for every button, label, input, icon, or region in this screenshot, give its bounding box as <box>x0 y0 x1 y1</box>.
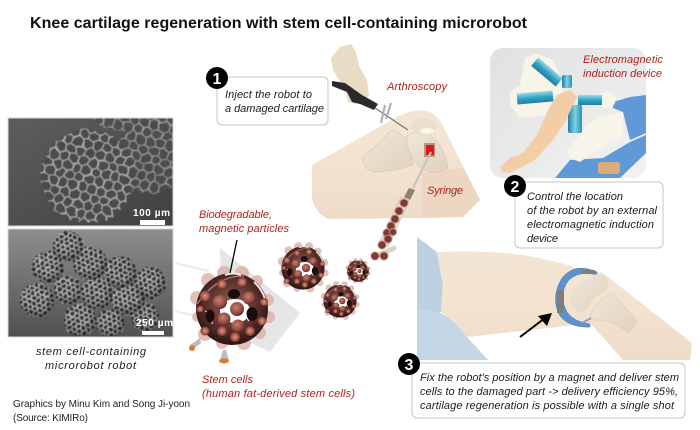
callout 2: electromagnetic induction <box>527 219 654 231</box>
label: device <box>583 54 664 80</box>
leg <box>500 90 577 173</box>
callout 2: of the robot by an external <box>527 205 658 217</box>
label: device: Electromagnetic <box>583 54 664 66</box>
bone: femur end <box>570 274 608 312</box>
credit: (Source: KIMIRo) <box>13 413 88 424</box>
label: stem cells <box>202 374 355 400</box>
callout 2 <box>504 175 663 248</box>
scale label: 250 µm: 250 µm <box>136 318 173 329</box>
bone: tibia <box>590 293 637 333</box>
caption: microrobot photos: stem cell-containing <box>36 346 147 358</box>
device frame <box>510 53 623 162</box>
label: biodegradable particles: magnetic particles <box>199 223 290 235</box>
badge 1: 1 <box>213 71 222 88</box>
callout 2: device <box>527 233 558 245</box>
large microrobot <box>190 266 275 350</box>
callout 3: Fix the robot's position by a magnet and deliver stem <box>420 372 679 384</box>
icon: stem cell <box>189 338 201 351</box>
badge 3: 3 <box>405 357 414 374</box>
label: biodegradable particles: Biodegradable, <box>199 209 272 221</box>
panel: electromagnetic induction device <box>490 48 664 178</box>
pointer: particles <box>230 240 237 273</box>
callout 1: a damaged cartilage <box>225 103 324 115</box>
panel: knee with magnet ring <box>417 237 692 360</box>
label: arthroscopy: Arthroscopy <box>386 81 448 93</box>
credit: Graphics by Minu Kim and Song Ji-yoon <box>13 399 190 410</box>
label: stem cells: Stem cells <box>202 374 254 386</box>
badge 3 <box>398 353 420 375</box>
icon: stem cell <box>219 350 229 364</box>
arrow <box>520 313 552 337</box>
callout 1 <box>206 67 328 125</box>
syringe with robots <box>371 152 431 260</box>
knee: arthroscopy view <box>312 110 480 219</box>
bone: patella <box>412 118 436 136</box>
callout 3: cells to the damaged part -> delivery efficiency 95%, <box>420 386 678 398</box>
callout 3 <box>398 353 685 418</box>
label: stem cells: (human fat-derived stem cells) <box>202 388 355 400</box>
magnet coils <box>517 58 602 133</box>
badge 2 <box>504 175 526 197</box>
photo: single microrobot SEM <box>8 118 174 226</box>
scale label: 100 µm: 100 µm <box>133 208 170 219</box>
patient body <box>555 95 646 178</box>
medium microrobot <box>278 242 329 293</box>
damaged cartilage marker <box>424 143 435 157</box>
icon: gloved hand with arthroscope <box>331 44 408 130</box>
bone: tibia and cartilage <box>407 132 448 172</box>
credit <box>13 399 190 424</box>
photo: microrobot cluster SEM <box>8 229 173 337</box>
label: syringe: Syringe <box>427 185 463 197</box>
bone: femur <box>363 130 413 172</box>
label: biodegradable particles <box>199 209 290 235</box>
magnification beam <box>175 248 300 352</box>
small microrobot <box>345 258 371 283</box>
caption: microrobot photos <box>36 346 147 372</box>
callout 3: cartilage regeneration is possible with a single shot <box>420 400 675 412</box>
caption: microrobot photos: microrobot robot <box>45 360 137 372</box>
badge 2: 2 <box>511 179 520 196</box>
callout 1: Inject the robot to <box>225 89 312 101</box>
label: device: induction device <box>583 68 662 80</box>
hand <box>598 162 620 174</box>
title: Knee cartilage regeneration with stem cell-containing microrobot <box>30 15 528 32</box>
callout 2: Control the location <box>527 191 623 203</box>
small microrobot <box>321 281 360 320</box>
magnet ring <box>555 268 597 327</box>
